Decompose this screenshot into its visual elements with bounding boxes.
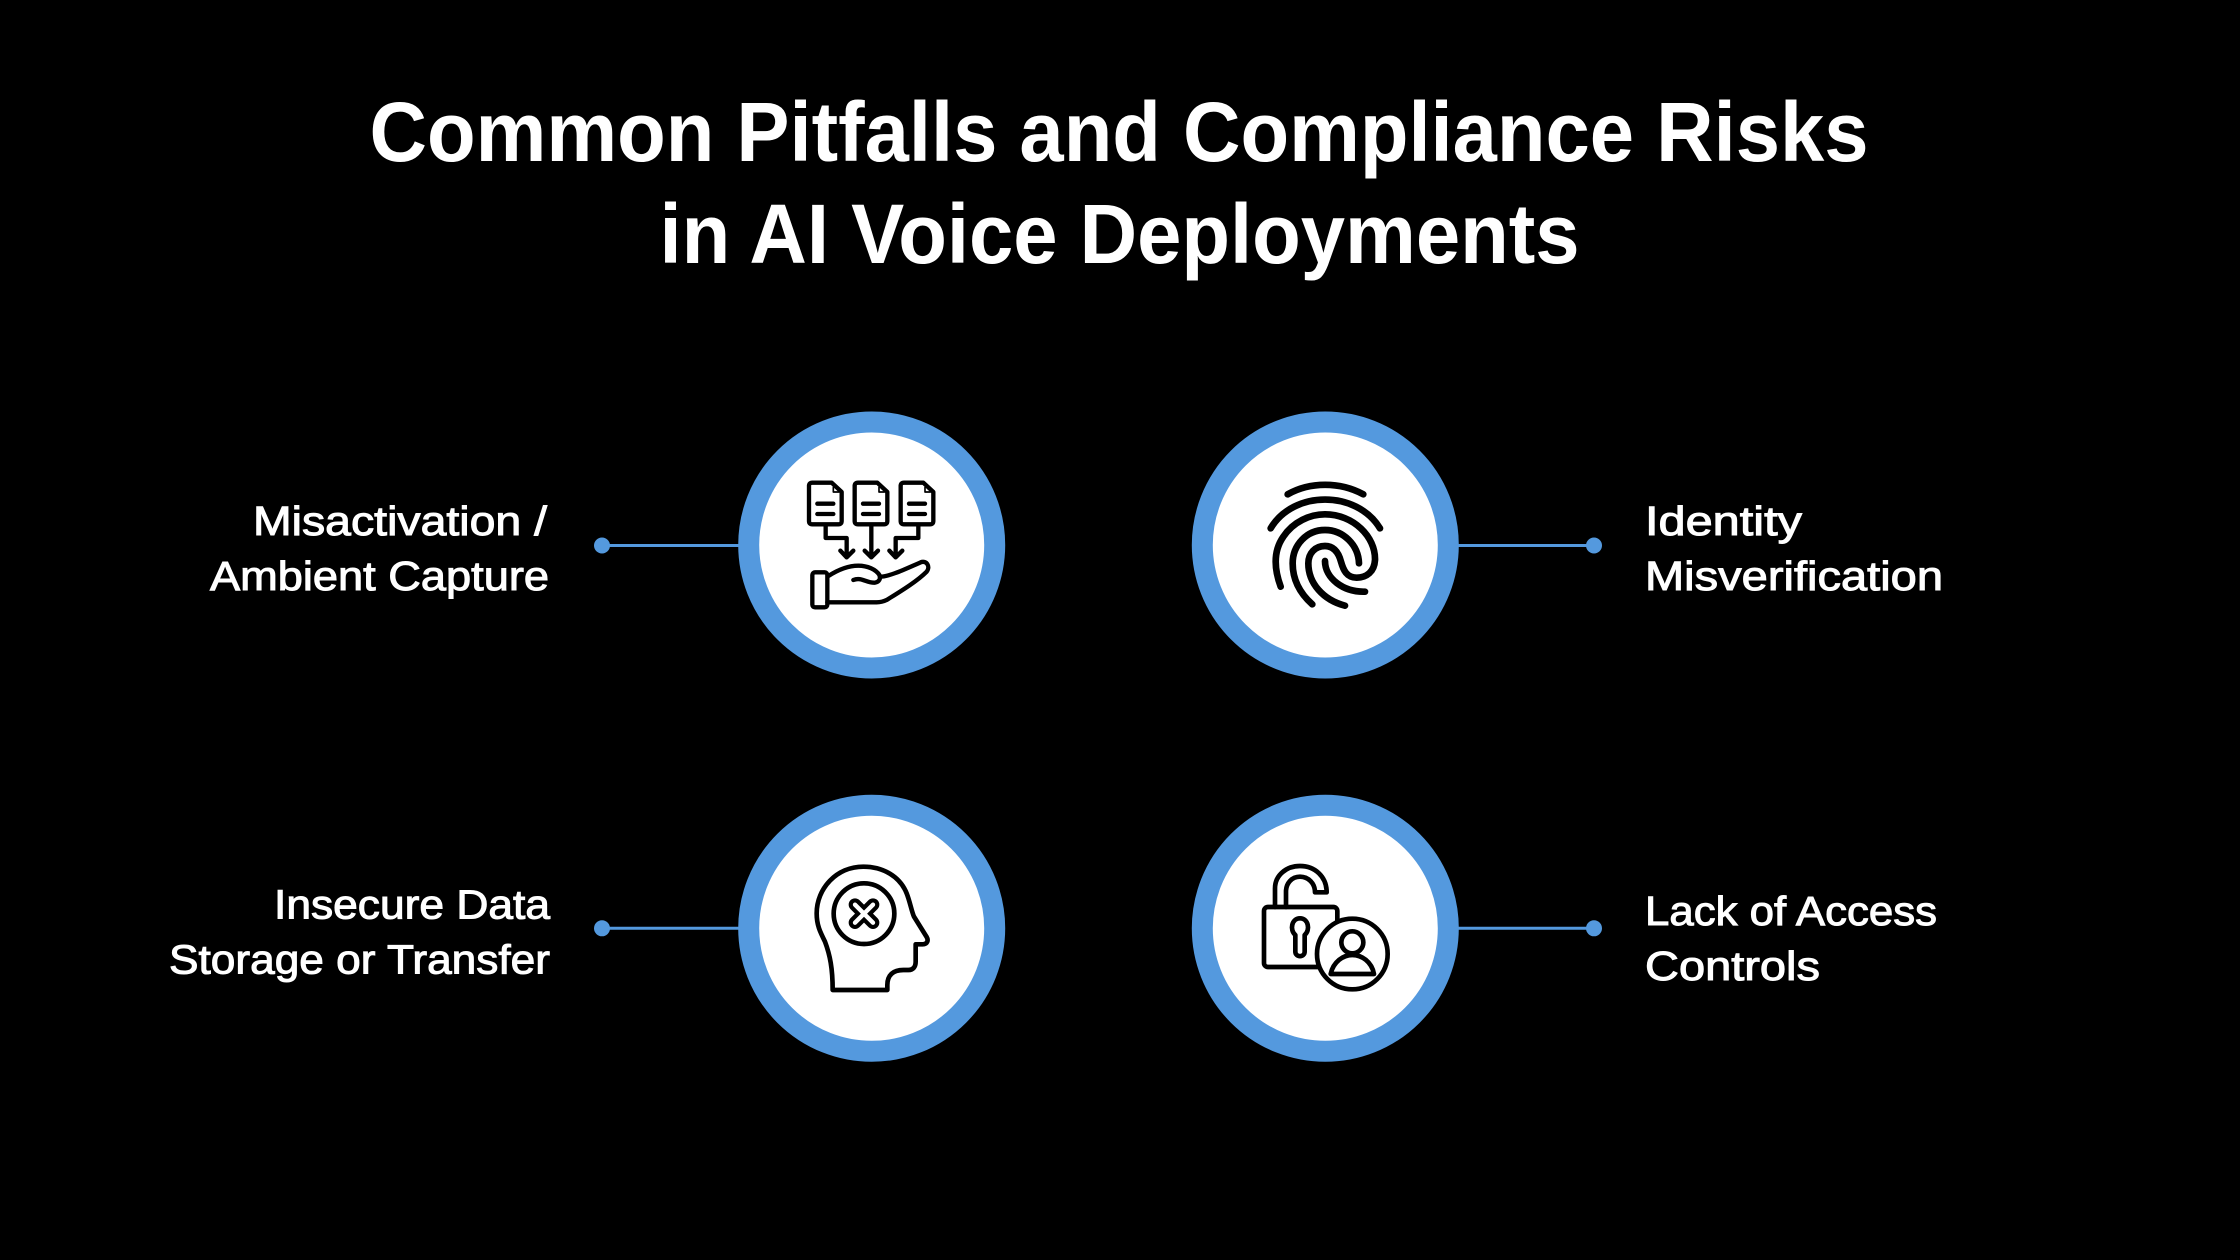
label: Lack of Access Controls <box>1645 888 1937 989</box>
connector <box>594 538 745 554</box>
icon: documents into hand <box>809 483 933 607</box>
badge ring <box>1202 805 1448 1051</box>
label: Insecure Data Storage or Transfer: Insecure Data <box>274 882 550 928</box>
label: Identity Misverification: Identity <box>1645 498 1803 544</box>
icon: head with cross <box>817 867 928 990</box>
title: in AI Voice Deployments <box>660 187 1580 281</box>
badge ring <box>749 805 995 1051</box>
panel: Identity Misverification <box>1202 422 1943 668</box>
connector <box>1450 920 1602 936</box>
connector <box>594 920 745 936</box>
label: Insecure Data Storage or Transfer <box>169 882 550 982</box>
panel: Misactivation / Ambient Capture <box>210 422 995 668</box>
label: Lack of Access Controls: Lack of Access <box>1645 888 1937 934</box>
label: Misactivation / Ambient Capture: Ambient Capture <box>210 553 549 599</box>
panel: Lack of Access Controls <box>1202 805 1937 1051</box>
label: Insecure Data Storage or Transfer: Storage or Transfer <box>169 936 550 982</box>
badge ring <box>1202 422 1448 668</box>
icon: open lock with user <box>1264 866 1388 989</box>
label: Identity Misverification <box>1645 498 1943 599</box>
label: Misactivation / Ambient Capture: Misactivation / <box>253 498 548 544</box>
label: Lack of Access Controls: Controls <box>1645 943 1820 989</box>
title: Common Pitfalls and Compliance Risks <box>370 85 1868 179</box>
connector <box>1450 538 1602 554</box>
badge ring <box>749 422 995 668</box>
label: Identity Misverification: Misverification <box>1645 553 1943 599</box>
panel: Insecure Data Storage or Transfer <box>169 805 995 1051</box>
label: Misactivation / Ambient Capture <box>210 498 549 599</box>
icon: fingerprint <box>1271 485 1380 606</box>
title <box>370 85 1868 281</box>
